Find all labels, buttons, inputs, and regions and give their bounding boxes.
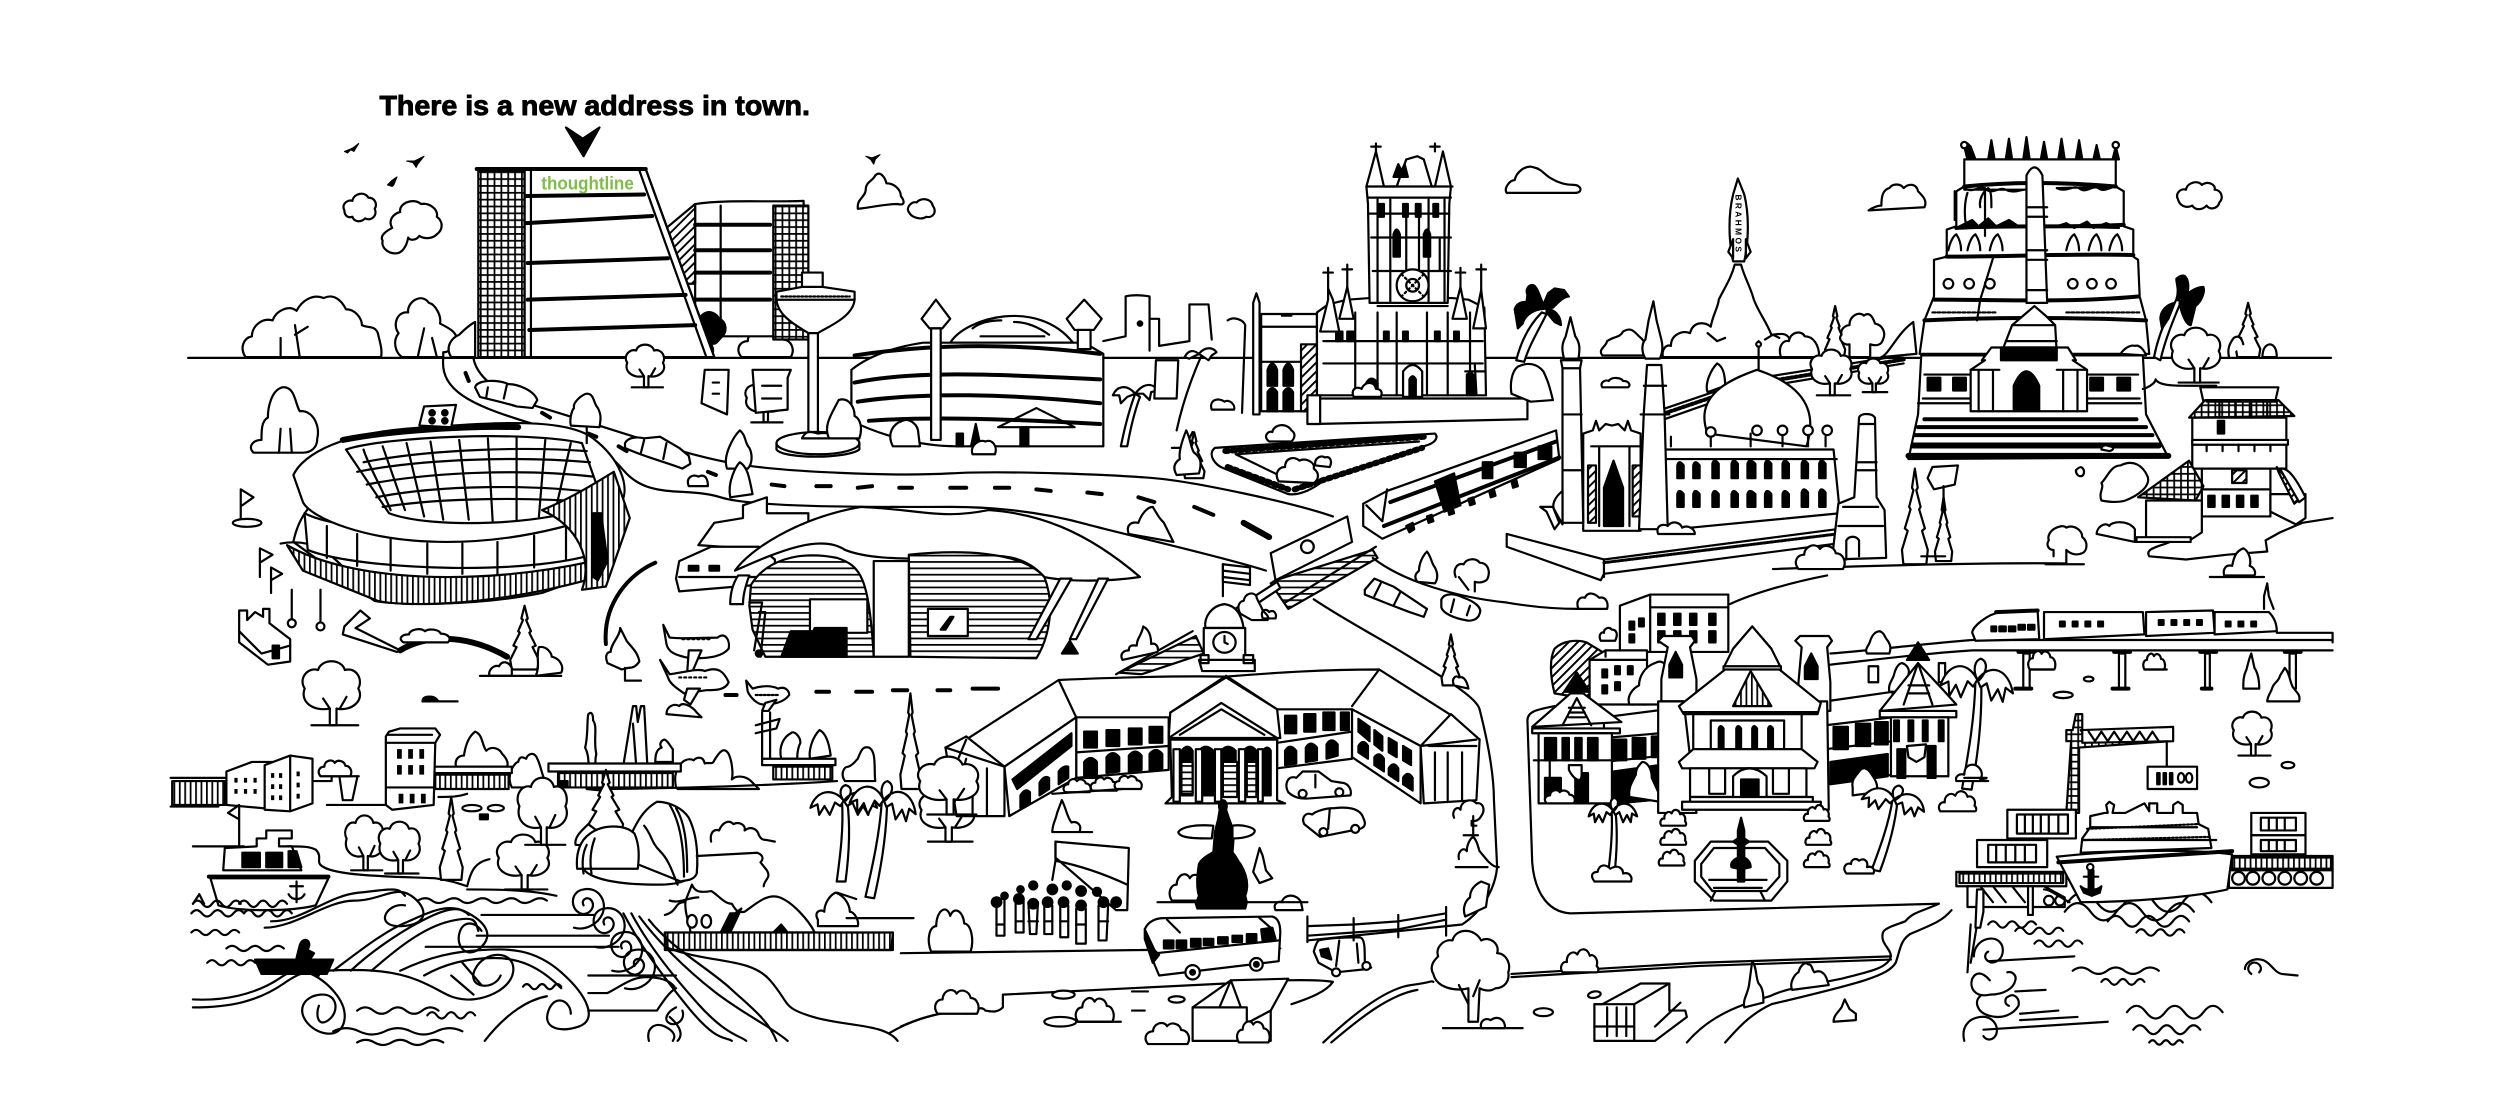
triangular garden	[1212, 425, 1436, 494]
trees around the mall	[626, 345, 996, 454]
trees right of rocket	[1780, 306, 1916, 357]
rocket	[1728, 179, 1751, 261]
stadium	[281, 405, 630, 604]
rocks and hills by the shore	[665, 885, 893, 950]
central palace	[1658, 626, 1832, 813]
palace left house	[1532, 673, 1621, 803]
cars on the road	[475, 381, 690, 469]
train crossing the bridge	[1363, 430, 1559, 539]
bus	[1145, 917, 1280, 979]
runway dashes	[725, 689, 998, 695]
bottom right swirls	[1963, 925, 2298, 1041]
water tower	[776, 273, 859, 457]
small roadside house	[1193, 979, 1288, 1042]
trees by the house and river curve	[2046, 463, 2333, 577]
conifers in the mosque garden	[1902, 465, 1958, 564]
bottom left roads and park	[890, 980, 1333, 1044]
second office building behind	[666, 201, 808, 340]
apartments behind the palace	[1551, 595, 1728, 705]
mosque gateway	[1583, 421, 1641, 531]
boat with flag	[209, 805, 328, 910]
black palm tree	[1515, 285, 1569, 362]
airport terminal	[735, 507, 1140, 658]
monument obelisk	[1832, 414, 1886, 559]
rocket smoke cloud	[1663, 265, 1799, 357]
spirals at the shoreline	[573, 889, 655, 989]
dark curve	[606, 563, 655, 644]
flyover bridge with stairs	[1212, 516, 1378, 639]
palms in the park	[711, 775, 974, 926]
cars below flyover	[1365, 579, 1480, 621]
clock tower	[1199, 604, 1255, 671]
far bank trees	[456, 730, 875, 789]
birds	[344, 143, 880, 186]
cars on the forecourt	[1286, 771, 1365, 837]
trees behind mosque	[1601, 350, 1888, 395]
tree left of stadium	[251, 387, 318, 453]
central portico	[1165, 677, 1285, 803]
small palms and roadside trees centre	[1113, 318, 1245, 478]
bottom right trees and river	[1687, 904, 1952, 1042]
mosque	[1507, 301, 1840, 580]
skyline behind	[1103, 295, 1212, 351]
church annexe	[1253, 293, 1317, 414]
palace grounds palms and bushes	[1589, 654, 2015, 881]
viaduct with metro train	[1830, 583, 2333, 689]
trees beside road	[570, 394, 1201, 542]
trees mid left	[303, 628, 920, 789]
trees on the forecourt	[918, 757, 1499, 952]
airport annexe buildings	[676, 497, 808, 604]
far bank bridges	[171, 759, 837, 807]
road curving round the hall	[901, 599, 1497, 953]
river flowing to the bottom	[623, 913, 898, 1041]
swirling waves left	[193, 889, 683, 1041]
central hall roof and wings	[945, 669, 1480, 816]
kerala style house	[2136, 387, 2305, 542]
palace right house	[1880, 642, 1956, 778]
gothic church with clock tower	[1307, 143, 1527, 424]
fence	[1307, 907, 1446, 942]
ocean waves left	[191, 894, 561, 1045]
temple steps and hall	[1908, 347, 2168, 459]
stairs beside clock tower	[1116, 626, 1204, 674]
palace ground	[1527, 706, 1939, 913]
horizon line	[188, 357, 2331, 359]
bottom centre big tree and roads	[1323, 931, 1891, 1042]
water ripples right	[1988, 893, 2223, 1045]
dock containers and crane	[1977, 714, 2305, 867]
thoughtline office building	[477, 169, 726, 357]
title: There is a new address in town.	[379, 90, 810, 121]
road with dashed centre line	[443, 359, 1333, 571]
docks	[1956, 856, 2333, 928]
trees right of temple	[2076, 303, 2277, 476]
flags and small house by stadium	[233, 489, 562, 676]
rocket: BRAHMOS	[1733, 194, 1742, 252]
round shopping mall	[851, 300, 1103, 446]
cruise ship	[2057, 802, 2232, 902]
park dome pavilion	[577, 802, 768, 886]
small bushes palace lawn	[1659, 805, 1831, 867]
statue on plinth	[1178, 800, 1255, 909]
elevated rail behind mosque	[1661, 355, 1904, 419]
bushes near viaduct	[1866, 631, 2300, 787]
towers and poles on the far bank	[585, 706, 780, 791]
shoreline left	[193, 770, 623, 896]
far bank buildings	[226, 728, 440, 811]
palace side wings	[1604, 692, 1893, 805]
auto rickshaw	[1314, 937, 1371, 976]
palm tree right of temple	[2154, 276, 2204, 360]
clouds in the sky	[344, 167, 2222, 253]
temple gopuram tower	[1920, 137, 2149, 354]
bushes right of church	[1511, 330, 1645, 402]
crowd with banner	[992, 842, 1129, 944]
airplanes	[660, 625, 789, 711]
black row boat	[255, 940, 333, 974]
fountain	[1695, 818, 1787, 901]
trees below mosque and road edge	[1373, 545, 2066, 609]
thoughtline logo: thoughtline	[541, 173, 634, 194]
arrow pointing at the building	[566, 128, 599, 156]
background bushes and trees on the horizon left	[243, 296, 793, 357]
